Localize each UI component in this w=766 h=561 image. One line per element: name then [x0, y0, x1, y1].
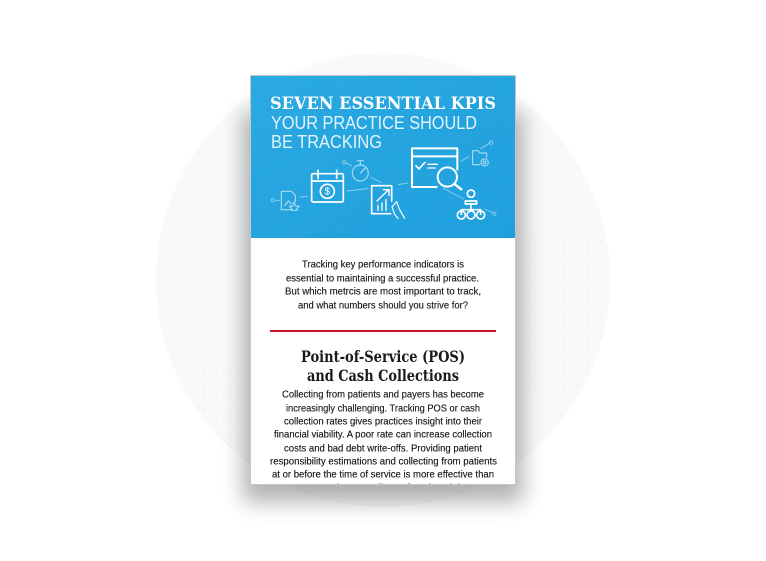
- title: [270, 94, 496, 152]
- icon: calendar with dollar: [312, 170, 343, 202]
- icon: stopwatch: [352, 161, 368, 181]
- icon: org chart person: [457, 190, 485, 219]
- section heading: Point-of-Service (POS): [301, 347, 465, 366]
- card shadow: [243, 112, 523, 502]
- intro text: and what numbers should you strive for?: [298, 300, 468, 312]
- icon: folder with gear: [473, 151, 488, 166]
- icon network: [271, 141, 496, 219]
- title: YOUR PRACTICE SHOULD: [271, 113, 477, 133]
- section heading: [301, 347, 465, 385]
- section body text: at or before the time of service is more effective than: [272, 470, 494, 480]
- section body text: increasingly challenging. Tracking POS or cash: [286, 404, 480, 414]
- section body text: [270, 390, 497, 484]
- red divider: [270, 330, 496, 332]
- infographic card: [250, 76, 516, 494]
- intro text: [285, 260, 481, 312]
- header panel: [251, 76, 515, 238]
- section body text: financial viability. A poor rate can increase collection: [274, 430, 492, 440]
- section body text: costs and bad debt write-offs. Providing patient: [284, 444, 482, 454]
- icon: window with checklist and magnifier: [412, 148, 461, 189]
- section body text: collection rates gives practices insight into their: [284, 416, 482, 428]
- title: BE TRACKING: [271, 132, 382, 152]
- background dot pattern: [203, 240, 601, 446]
- icon: document with star: [281, 191, 299, 210]
- intro text: But which metrcis are most important to track,: [285, 286, 481, 298]
- section body text: responsibility estimations and collecting from patients: [270, 456, 497, 468]
- title: SEVEN ESSENTIAL KPIS: [270, 94, 496, 114]
- icon: calendar with dollar: $: [325, 187, 331, 198]
- background circle: [156, 53, 610, 507]
- section heading: and Cash Collections: [307, 366, 459, 385]
- section body text: attempting to collect after the visit.: [300, 483, 466, 494]
- connector lines: [271, 141, 496, 215]
- intro text: Tracking key performance indicators is: [302, 260, 464, 270]
- icon: tablet with chart: [372, 186, 405, 218]
- intro text: essential to maintaining a successful practice.: [286, 274, 479, 284]
- section body text: Collecting from patients and payers has become: [282, 390, 484, 400]
